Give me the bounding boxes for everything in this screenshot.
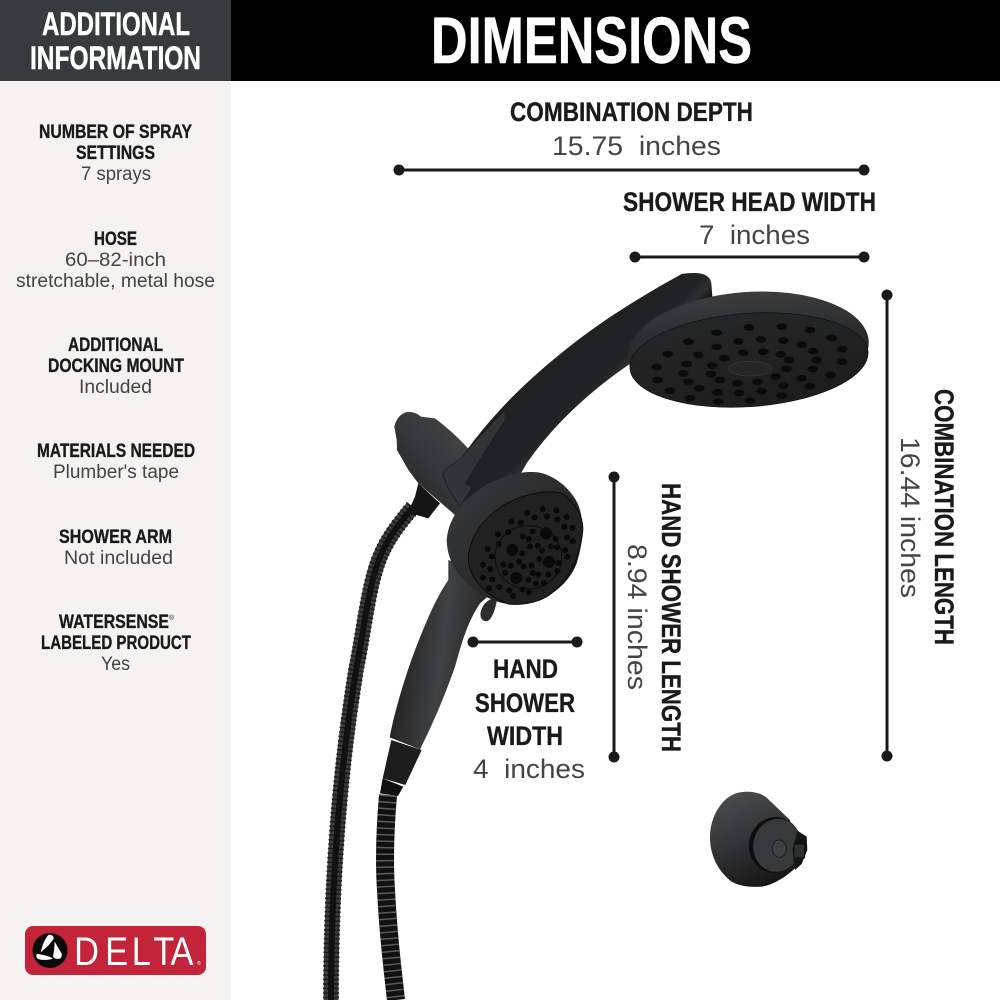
- spec: additional docking mount: [48, 334, 184, 398]
- sidebar background: [0, 0, 231, 1000]
- dimension: hand shower width: HAND: [493, 654, 558, 684]
- arm: [443, 273, 713, 503]
- hand shower handle: [380, 560, 507, 796]
- dimension: combination depth: COMBINATION DEPTH: [510, 97, 753, 127]
- dimension: combination length: 16.44 inches: [895, 437, 925, 598]
- spec: watersense: WATERSENSE: [59, 611, 169, 633]
- spec: additional docking mount: ADDITIONAL: [68, 334, 163, 356]
- spec: hose: 60–82-inch: [65, 250, 166, 271]
- spec: watersense: ®: [169, 614, 175, 622]
- spec: shower arm: SHOWER ARM: [59, 526, 172, 548]
- dimension: hand shower length: [608, 472, 686, 762]
- header: additional information: INFORMATION: [30, 40, 201, 76]
- hose: left loop: [331, 507, 413, 1000]
- delta logo: ®: [197, 960, 201, 967]
- hose: handle section: [385, 795, 396, 1000]
- spec: materials needed: Plumber's tape: [53, 462, 179, 483]
- docking mount: [710, 792, 807, 887]
- dimension: combination length: [882, 290, 959, 762]
- dimension: hand shower width: SHOWER: [475, 688, 575, 718]
- spec: shower arm: [59, 526, 173, 569]
- hand shower head: [447, 472, 583, 621]
- dimension: hand shower length: 8.94 inches: [622, 544, 652, 690]
- spec: watersense: LABELED PRODUCT: [41, 632, 191, 654]
- delta logo: DELTA: [74, 929, 194, 974]
- spec: additional docking mount: DOCKING MOUNT: [48, 355, 184, 377]
- spec: hose: stretchable, metal hose: [16, 271, 215, 292]
- rain shower head: [624, 284, 873, 415]
- header: dimensions: DIMENSIONS: [431, 3, 752, 77]
- delta logo: [25, 926, 206, 975]
- spec: additional docking mount: Included: [79, 377, 152, 398]
- dimension: combination depth: 15.75 inches: [552, 131, 721, 161]
- dimension: hand shower width: 4 inches: [473, 754, 585, 784]
- dimension: hand shower width: WIDTH: [487, 721, 563, 751]
- dimension: shower head width: SHOWER HEAD WIDTH: [623, 187, 876, 217]
- spec: number of spray settings: NUMBER OF SPRAY: [39, 121, 192, 143]
- dimension: shower head width: 7 inches: [699, 220, 810, 250]
- header: dimensions: [231, 0, 1000, 81]
- spec: number of spray settings: [39, 121, 192, 185]
- spec: watersense: Yes: [101, 654, 130, 675]
- spec: hose: [16, 228, 215, 292]
- spec: number of spray settings: 7 sprays: [81, 164, 151, 185]
- dimension: shower head width: [623, 187, 876, 262]
- spec: number of spray settings: SETTINGS: [76, 142, 155, 164]
- spec: hose: HOSE: [94, 228, 137, 250]
- spec: shower arm: Not included: [64, 548, 173, 569]
- arm base plate: [443, 410, 505, 507]
- dimension: combination length: COMBINATION LENGTH: [929, 389, 959, 645]
- spec: watersense: [41, 611, 191, 675]
- header: additional information: ADDITIONAL: [42, 6, 190, 42]
- dimension: hand shower width: [468, 636, 585, 784]
- dimension: hand shower length: HAND SHOWER LENGTH: [656, 483, 686, 752]
- mount body: [394, 412, 472, 518]
- spec: materials needed: MATERIALS NEEDED: [37, 440, 195, 462]
- spec: materials needed: [37, 440, 195, 483]
- header: additional information: [0, 0, 231, 81]
- dimension: combination depth: [394, 97, 870, 176]
